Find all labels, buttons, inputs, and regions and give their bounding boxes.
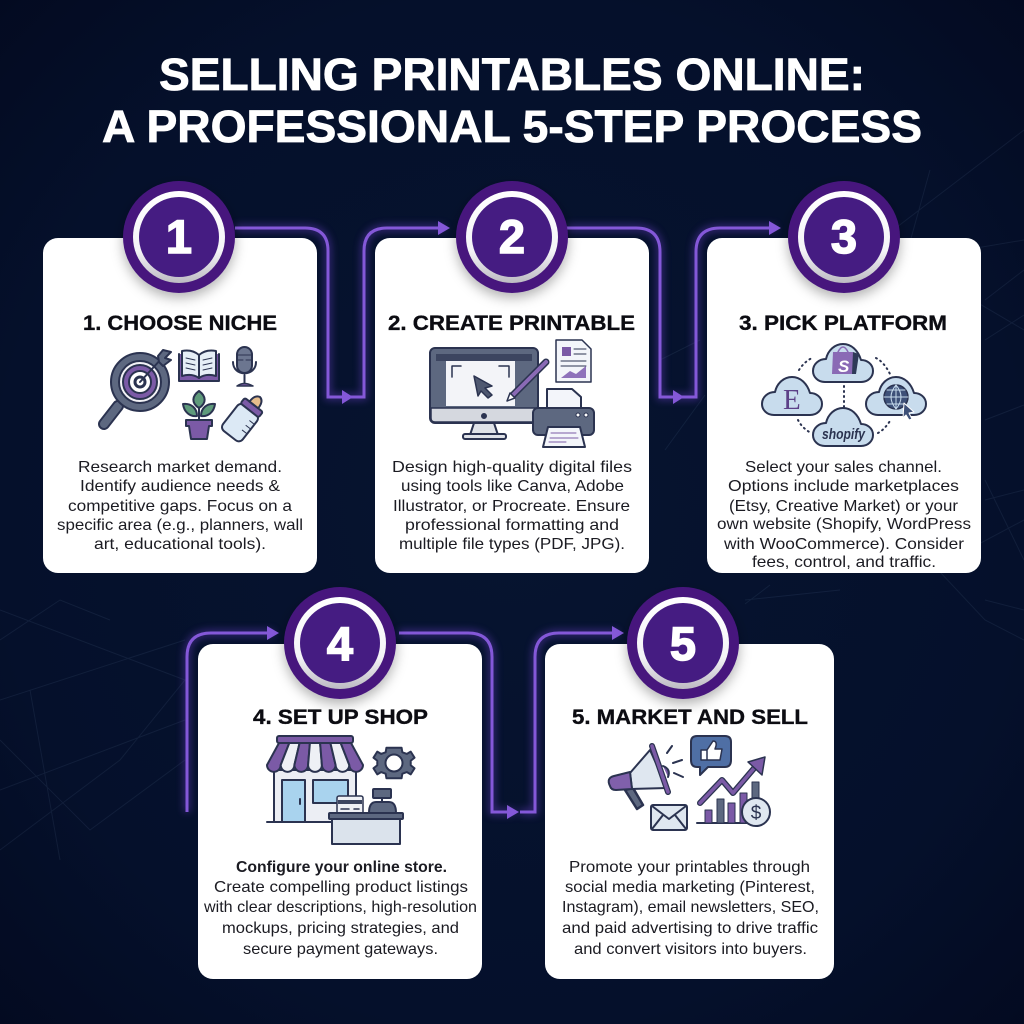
description: Instagram), email newsletters, SEO, xyxy=(562,899,819,916)
heading: 2. CREATE PRINTABLE xyxy=(388,312,635,335)
icon: platform clouds xyxy=(762,344,926,446)
panel: step 3 xyxy=(707,181,981,573)
title: A PROFESSIONAL 5-STEP PROCESS xyxy=(102,101,922,152)
description: Options include marketplaces xyxy=(728,478,959,495)
description: Configure your online store. xyxy=(236,859,447,876)
panel: step 1 xyxy=(43,181,317,573)
description: art, educational tools). xyxy=(94,536,266,553)
description: fees, control, and traffic. xyxy=(752,554,936,571)
description: (Etsy, Creative Market) or your xyxy=(729,498,959,515)
description: social media marketing (Pinterest, xyxy=(565,879,815,896)
icon: platform clouds: shopify xyxy=(822,426,866,443)
heading: 5. MARKET AND SELL xyxy=(572,706,808,729)
description: Design high-quality digital files xyxy=(392,459,632,476)
connector: step 1 to step 2 xyxy=(235,221,450,404)
number badge 4 xyxy=(284,587,396,699)
number badge 5 xyxy=(627,587,739,699)
description xyxy=(203,859,477,958)
description: own website (Shopify, WordPress xyxy=(717,516,971,533)
description: Research market demand. xyxy=(78,459,282,476)
connector: into step 4 xyxy=(187,626,279,812)
description: using tools like Canva, Adobe xyxy=(401,478,624,495)
panel: step 4 xyxy=(198,587,482,979)
icon: platform clouds: E xyxy=(783,384,801,416)
description: and convert visitors into buyers. xyxy=(574,941,807,958)
description: with WooCommerce). Consider xyxy=(723,536,965,553)
number badge 4: 4 xyxy=(327,617,353,670)
number badge 5: 5 xyxy=(670,617,696,670)
description: secure payment gateways. xyxy=(243,941,438,958)
description: multiple file types (PDF, JPG). xyxy=(399,536,625,553)
number badge 2 xyxy=(456,181,568,293)
heading: 1. CHOOSE NICHE xyxy=(83,312,277,335)
icon: megaphone, like bubble, envelope, growth chart xyxy=(609,736,770,830)
description xyxy=(717,459,971,571)
number badge 1: 1 xyxy=(166,210,192,263)
title: SELLING PRINTABLES ONLINE: xyxy=(159,49,865,100)
icon: monitor, pencil, document, printer xyxy=(430,340,594,447)
description: and paid advertising to drive traffic xyxy=(562,920,818,937)
connector: step 4 to step 5 xyxy=(399,626,624,819)
description: Promote your printables through xyxy=(569,859,810,876)
connector: step 2 to step 3 xyxy=(567,221,781,404)
heading: 3. PICK PLATFORM xyxy=(739,312,947,335)
description: professional formatting and xyxy=(405,517,619,534)
description: Select your sales channel. xyxy=(745,459,942,476)
number badge 3: 3 xyxy=(831,210,857,263)
heading: 4. SET UP SHOP xyxy=(253,706,428,729)
description: specific area (e.g., planners, wall xyxy=(57,517,303,534)
connectors glow xyxy=(187,228,776,812)
description xyxy=(562,859,819,958)
icon: storefront, gear, register xyxy=(267,736,415,844)
description xyxy=(57,459,303,553)
panel: step 2 xyxy=(375,181,649,573)
title xyxy=(102,49,922,152)
number badge 1 xyxy=(123,181,235,293)
description: Illustrator, or Procreate. Ensure xyxy=(393,498,630,515)
description xyxy=(392,459,632,553)
panel: step 5 xyxy=(545,587,834,979)
description: with clear descriptions, high-resolution xyxy=(203,899,477,916)
description: Identify audience needs & xyxy=(80,478,280,495)
icon: megaphone, like bubble, envelope, growth chart: $ xyxy=(751,803,762,824)
description: mockups, pricing strategies, and xyxy=(222,920,459,937)
description: competitive gaps. Focus on a xyxy=(68,498,292,515)
number badge 3 xyxy=(788,181,900,293)
icon: target, book, mic, plant, bottle xyxy=(104,347,270,443)
number badge 2: 2 xyxy=(499,210,525,263)
icon: platform clouds: S xyxy=(838,357,850,376)
description: Create compelling product listings xyxy=(214,879,468,896)
